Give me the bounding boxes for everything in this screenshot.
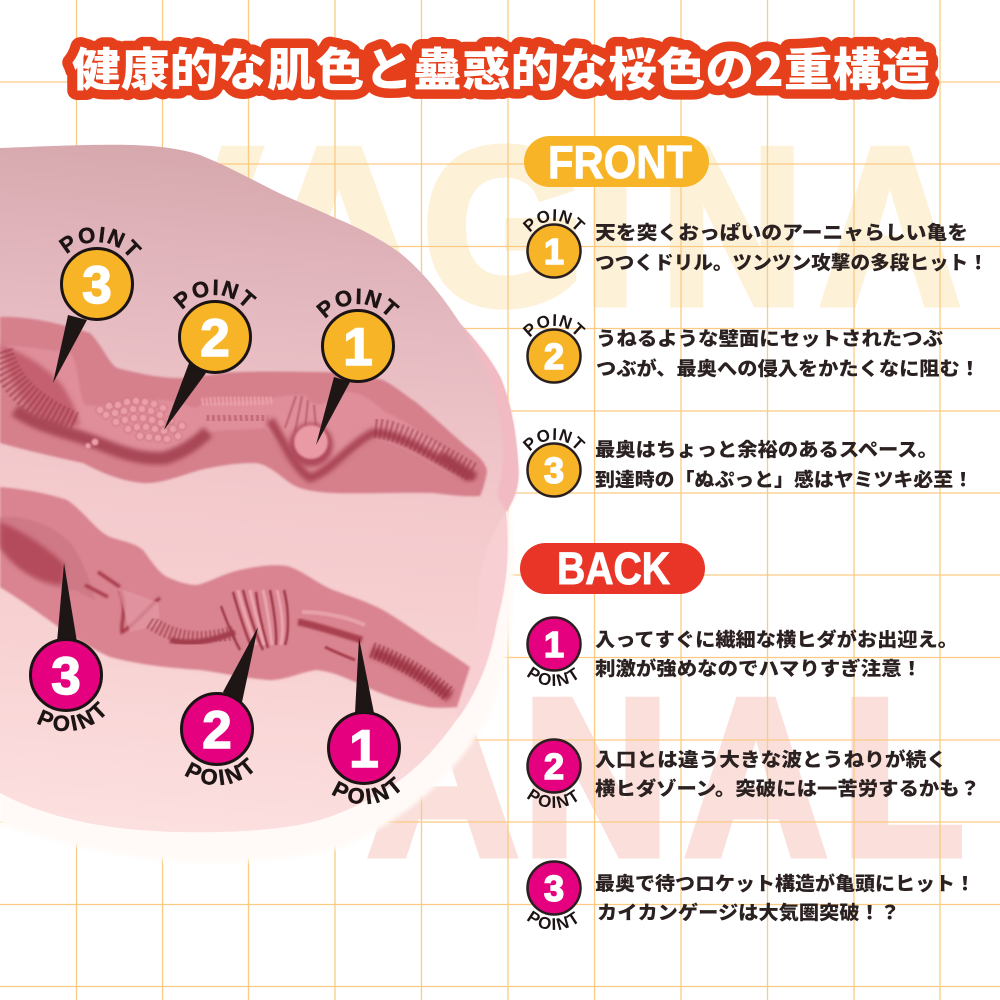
front item 3: 最奥はちょっと余裕のあるスペース。 <box>595 435 938 462</box>
pin: front point 1: POINT <box>316 288 400 318</box>
watermark: ANAL <box>368 654 964 902</box>
pin: front point 1: 1 <box>343 318 373 377</box>
pin: back point 1 <box>327 638 401 804</box>
back ridges <box>221 590 288 650</box>
back item 1: 1 <box>544 624 564 665</box>
pin: back point 1: POINT <box>332 776 400 804</box>
back item 2 <box>526 738 980 808</box>
front item 3: 3 <box>544 450 564 491</box>
watermark: ANAL: L <box>842 654 964 902</box>
front item 1: 1 <box>544 231 564 272</box>
right rim, front half <box>462 326 519 512</box>
body silhouette <box>0 145 519 832</box>
back item 3: カイカンゲージは大気圏突破！？ <box>597 898 900 925</box>
pin: back point 3 <box>29 563 105 732</box>
back item 1 <box>526 616 958 686</box>
pin: back point 2: 2 <box>202 701 232 760</box>
watermark: VAGINA: A <box>258 103 420 351</box>
watermark: VAGINA: A <box>820 103 960 351</box>
pin: front point 2 <box>164 280 257 430</box>
front item 3: 到達時の「ぬぷっと」感はヤミツキ必至！ <box>595 465 973 492</box>
front item 3: POINT <box>522 428 586 451</box>
pin: back point 2 <box>180 627 258 786</box>
front striated fan <box>0 345 80 428</box>
front item 3 <box>522 428 973 498</box>
back item 1: 刺激が強めなのでハマりすぎ注意！ <box>595 654 922 681</box>
watermark: VAGINA: N <box>661 103 803 351</box>
pin: front point 3: POINT <box>58 226 142 256</box>
back item 3: POINT <box>526 910 578 930</box>
pin: front point 3: 3 <box>82 256 112 315</box>
front item 1: POINT <box>522 209 586 232</box>
back item 2: 2 <box>544 746 564 787</box>
front channel <box>0 317 487 496</box>
front item 2: POINT <box>522 314 586 337</box>
watermark: VAGINA: V <box>110 103 260 351</box>
watermark: ANAL: A <box>368 654 518 902</box>
soft white fade below the body <box>0 510 513 862</box>
front bumps <box>85 397 186 449</box>
back cavity <box>0 517 95 600</box>
heading: BACK: BACK <box>557 543 670 594</box>
back mid details <box>85 572 160 632</box>
watermark: VAGINA: I <box>585 103 635 351</box>
front item 2: つぶが、最奥への侵入をかたくなに阻む！ <box>596 354 980 381</box>
back right details <box>298 622 362 640</box>
watermark: VAGINA <box>110 103 960 351</box>
front item 2 <box>522 314 980 384</box>
right rim, back half <box>452 512 507 718</box>
pin: back point 3: POINT <box>36 700 105 732</box>
back item 3 <box>526 860 975 930</box>
back item 1: 入ってすぐに繊細な横ヒダがお出迎え。 <box>595 625 958 652</box>
front sphere <box>289 423 333 467</box>
watermark: VAGINA: G <box>423 103 585 351</box>
pin: front point 2: POINT <box>172 280 257 310</box>
back item 2: POINT <box>526 788 578 808</box>
back item 2: 横ヒダゾーン。突破には一苦労するかも？ <box>595 774 980 801</box>
pin: back point 1: 1 <box>349 720 379 779</box>
front item 2: 2 <box>544 336 564 377</box>
back item 2: 入口とは違う大きな波とうねりが続く <box>595 745 947 772</box>
back channel <box>0 487 470 708</box>
back item 1: POINT <box>526 666 578 686</box>
front dark band <box>15 410 208 458</box>
pin: front point 1 <box>316 288 400 445</box>
watermark: ANAL: N <box>523 654 669 902</box>
watermark: ANAL: A <box>685 654 827 902</box>
front item 1: 天を突くおっぱいのアーニャらしい亀を <box>595 218 968 245</box>
title: 健康的な肌色と蠱惑的な桜色の2重構造 <box>72 34 930 100</box>
back item 3: 3 <box>544 868 564 909</box>
heading: FRONT: FRONT <box>548 136 692 188</box>
pin: back point 2: POINT <box>184 757 254 786</box>
front item 2: うねるような壁面にセットされたつぶ <box>596 324 943 351</box>
front item 1: つつくドリル。ツンツン攻撃の多段ヒット！ <box>595 248 988 275</box>
front item 1 <box>522 209 988 279</box>
back item 3: 最奥で待つロケット構造が亀頭にヒット！ <box>595 869 975 896</box>
front inner surface <box>0 345 470 482</box>
product cross-section illustration <box>0 145 519 862</box>
pin: front point 2: 2 <box>200 309 230 368</box>
pin: back point 3: 3 <box>51 647 81 706</box>
pin: front point 3 <box>53 226 142 383</box>
